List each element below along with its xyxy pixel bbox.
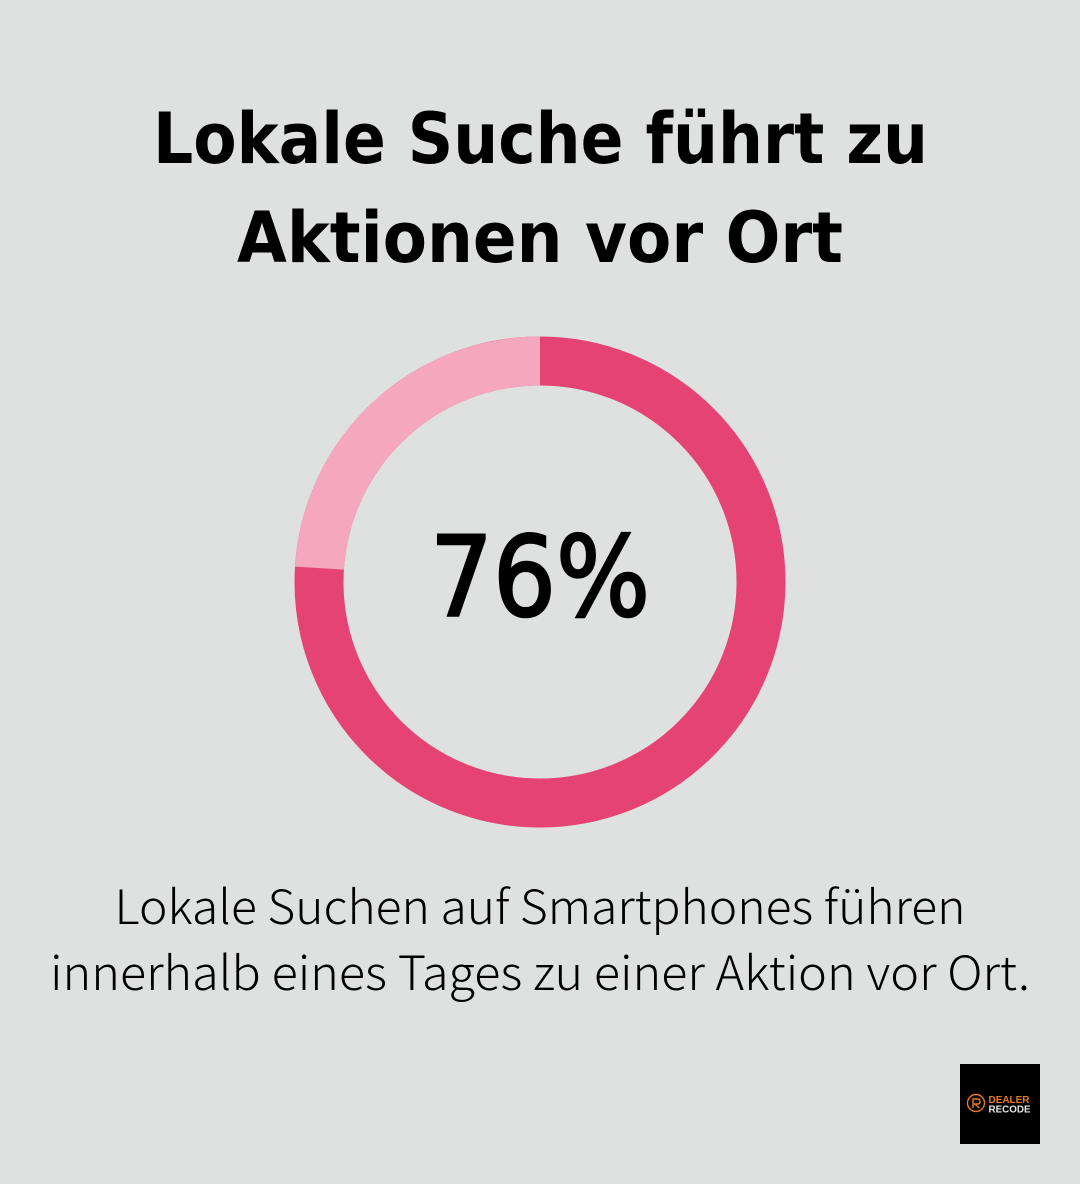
logo: Dealer Recode bbox=[960, 1064, 1040, 1144]
donut chart: 76% bbox=[319, 361, 761, 803]
title bbox=[153, 98, 928, 279]
title: Aktionen vor Ort bbox=[237, 197, 843, 279]
title: Lokale Suche führt zu bbox=[153, 98, 928, 180]
logo wordmark: RECODE bbox=[988, 1104, 1031, 1116]
description: Lokale Suchen auf Smartphones führen bbox=[114, 869, 966, 938]
description: innerhalb eines Tages zu einer Aktion vor Ort. bbox=[50, 935, 1030, 1004]
logo wordmark: DEALER bbox=[988, 1095, 1030, 1106]
icon: logo ring bbox=[968, 1094, 984, 1112]
big number: 76% bbox=[430, 514, 650, 642]
description bbox=[50, 869, 1030, 1004]
logo wordmark bbox=[988, 1095, 1031, 1116]
